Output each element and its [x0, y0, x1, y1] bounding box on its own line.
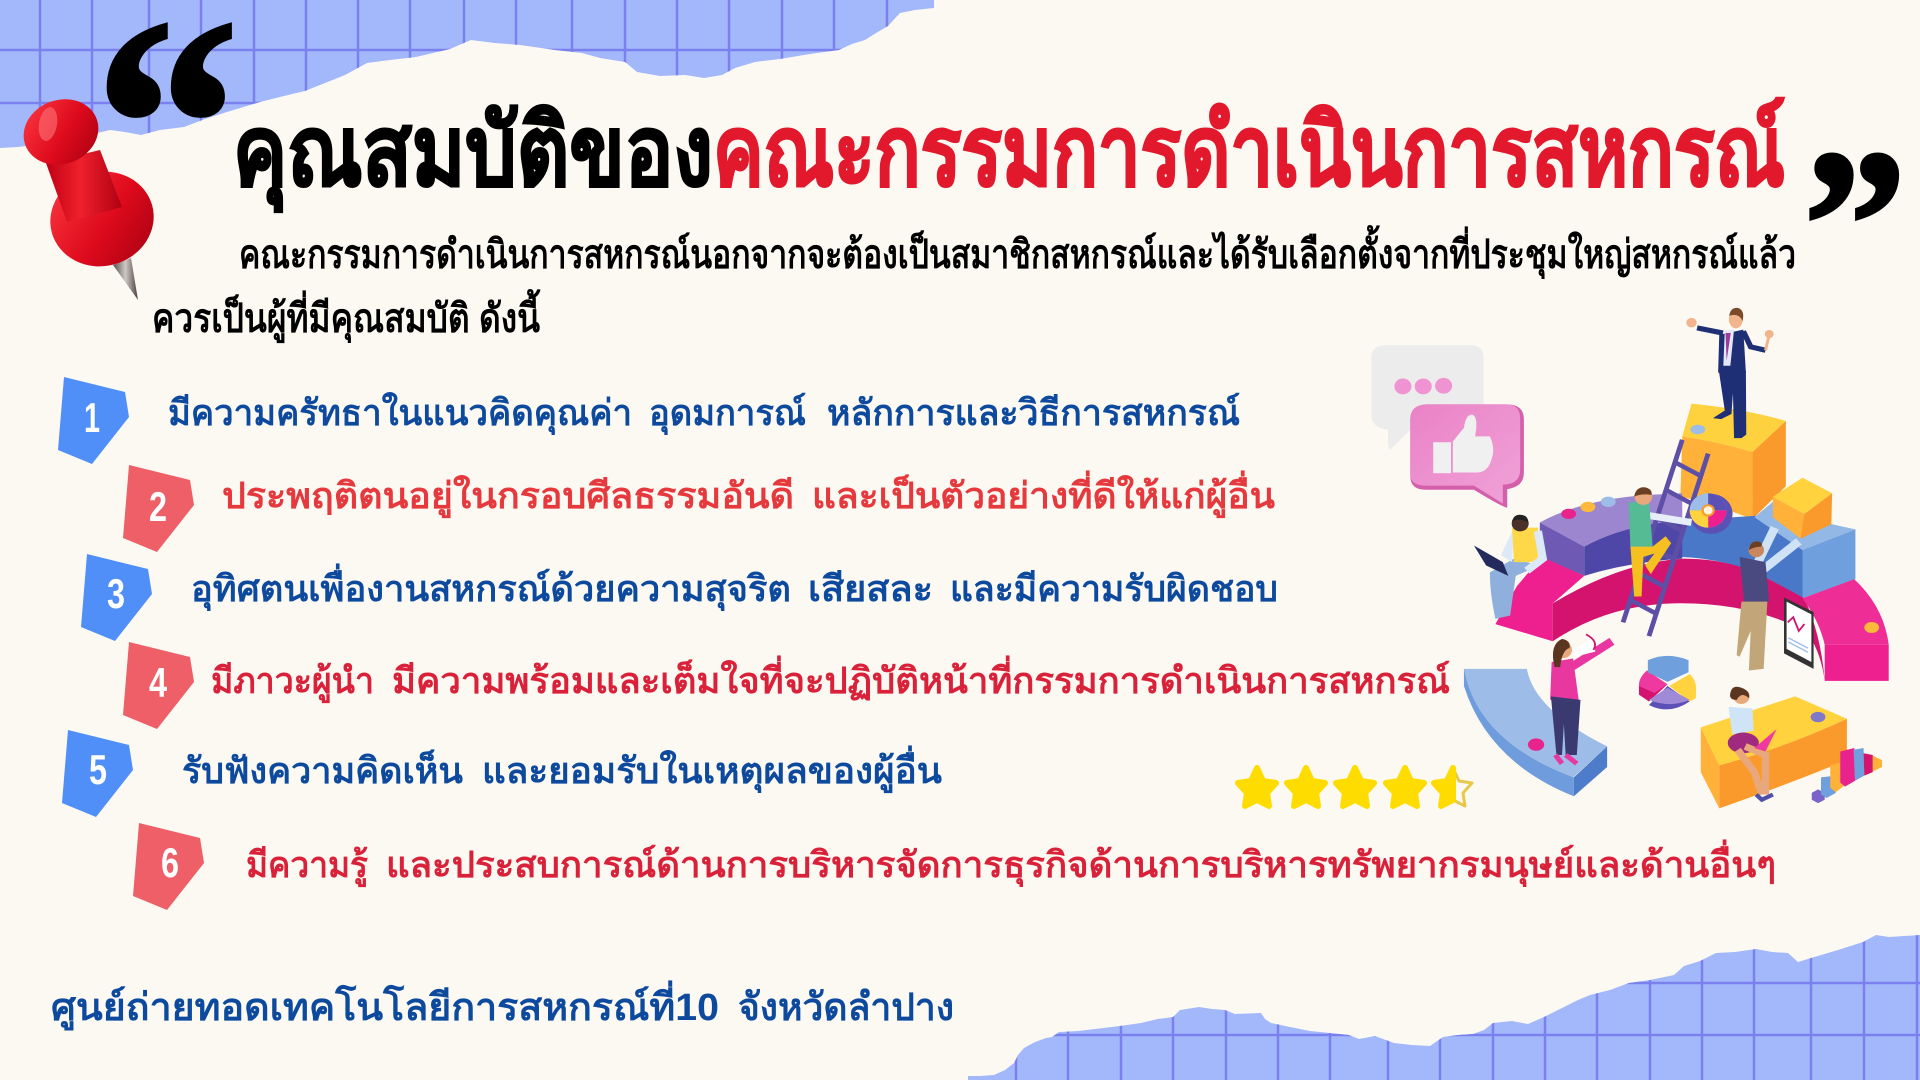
- item 3: [81, 554, 1278, 641]
- person: woman seated with laptop: [1728, 687, 1777, 800]
- item 1: อุดมการณ์: [649, 392, 806, 436]
- item 1: หลักการและวิธีการสหกรณ์: [827, 392, 1240, 433]
- orange tall block: [1680, 404, 1786, 519]
- item 4: 4: [149, 659, 167, 706]
- orange cube: [1773, 478, 1832, 539]
- item 1: มีความครัทธาในแนวคิดคุณค่า: [168, 391, 632, 436]
- illustration: team building isometric scene: [1464, 308, 1889, 808]
- footer organisation name: [51, 980, 954, 1031]
- item 5: 5: [89, 746, 107, 793]
- item 4: มีภาวะผู้นำ: [211, 660, 374, 704]
- donut chart: [1690, 493, 1733, 534]
- item 1: [58, 377, 1240, 464]
- item 3: 3: [107, 570, 125, 617]
- title: [233, 96, 1785, 213]
- title: คุณสมบัติของ: [233, 96, 713, 213]
- icon: red push pin: [14, 89, 164, 300]
- footer organisation name: จังหวัดลำปาง: [738, 987, 954, 1029]
- intro text: ควรเป็นผู้ที่มีคุณสมบัติ ดังนี้: [152, 289, 541, 344]
- tablet: [1784, 598, 1814, 669]
- person: climbing ladder: [1629, 487, 1692, 597]
- item 6: และประสบการณ์ด้านการบริหารจัดการธุรกิจด้านการบริหารทรัพยากรมนุษย์และด้านอื่นๆ: [386, 839, 1776, 888]
- person: seated with laptop: [1474, 515, 1543, 619]
- icon: chat bubbles with thumbs up: [1371, 345, 1524, 508]
- item 2: 2: [149, 483, 167, 530]
- item 2: และเป็นตัวอย่างที่ดีให้แก่ผู้อื่น: [812, 470, 1275, 519]
- item 6: [133, 823, 1776, 910]
- item 6: มีความรู้: [246, 844, 369, 888]
- item 2: ประพฤติตนอยู่ในกรอบศีลธรรมอันดี: [222, 474, 794, 519]
- mini bar chart: [1812, 748, 1882, 803]
- item 5: และยอมรับในเหตุผลของผู้อื่น: [482, 745, 942, 794]
- blue tier: [1680, 502, 1855, 598]
- item 4: มีความพร้อมและเต็มใจที่จะปฏิบัติหน้าที่กรรมการดำเนินการสหกรณ์: [392, 655, 1450, 701]
- torn paper bottom: [960, 930, 1920, 1080]
- person: man in suit: [1686, 308, 1774, 438]
- star rating: [1238, 768, 1472, 806]
- person: man holding cube: [1737, 528, 1799, 671]
- footer organisation name: ศูนย์ถ่ายทอดเทคโนโลยีการสหกรณ์ที่10: [51, 980, 719, 1031]
- item 1: 1: [84, 394, 100, 441]
- light blue arc block: [1464, 669, 1607, 796]
- item 3: อุทิศตนเพื่องานสหกรณ์ด้วยความสุจริต: [191, 563, 791, 612]
- item 3: และมีความรับผิดชอบ: [950, 568, 1278, 609]
- item 6: 6: [161, 839, 179, 886]
- torn paper top: [0, 0, 940, 150]
- item 2: [123, 465, 1275, 552]
- intro text: [152, 225, 1796, 344]
- closing quotation mark: ”: [1803, 105, 1907, 344]
- item 4: [123, 642, 1450, 729]
- ladder: [1623, 440, 1708, 636]
- pie chart: [1639, 656, 1696, 709]
- person: woman with megaphone: [1550, 634, 1612, 764]
- purple tier: [1540, 493, 1682, 576]
- yellow bench block: [1701, 696, 1847, 808]
- magenta arch: [1495, 557, 1889, 681]
- item 5: รับฟังความคิดเห็น: [182, 748, 463, 791]
- item 3: เสียสละ: [808, 568, 933, 609]
- item 5: [62, 730, 942, 817]
